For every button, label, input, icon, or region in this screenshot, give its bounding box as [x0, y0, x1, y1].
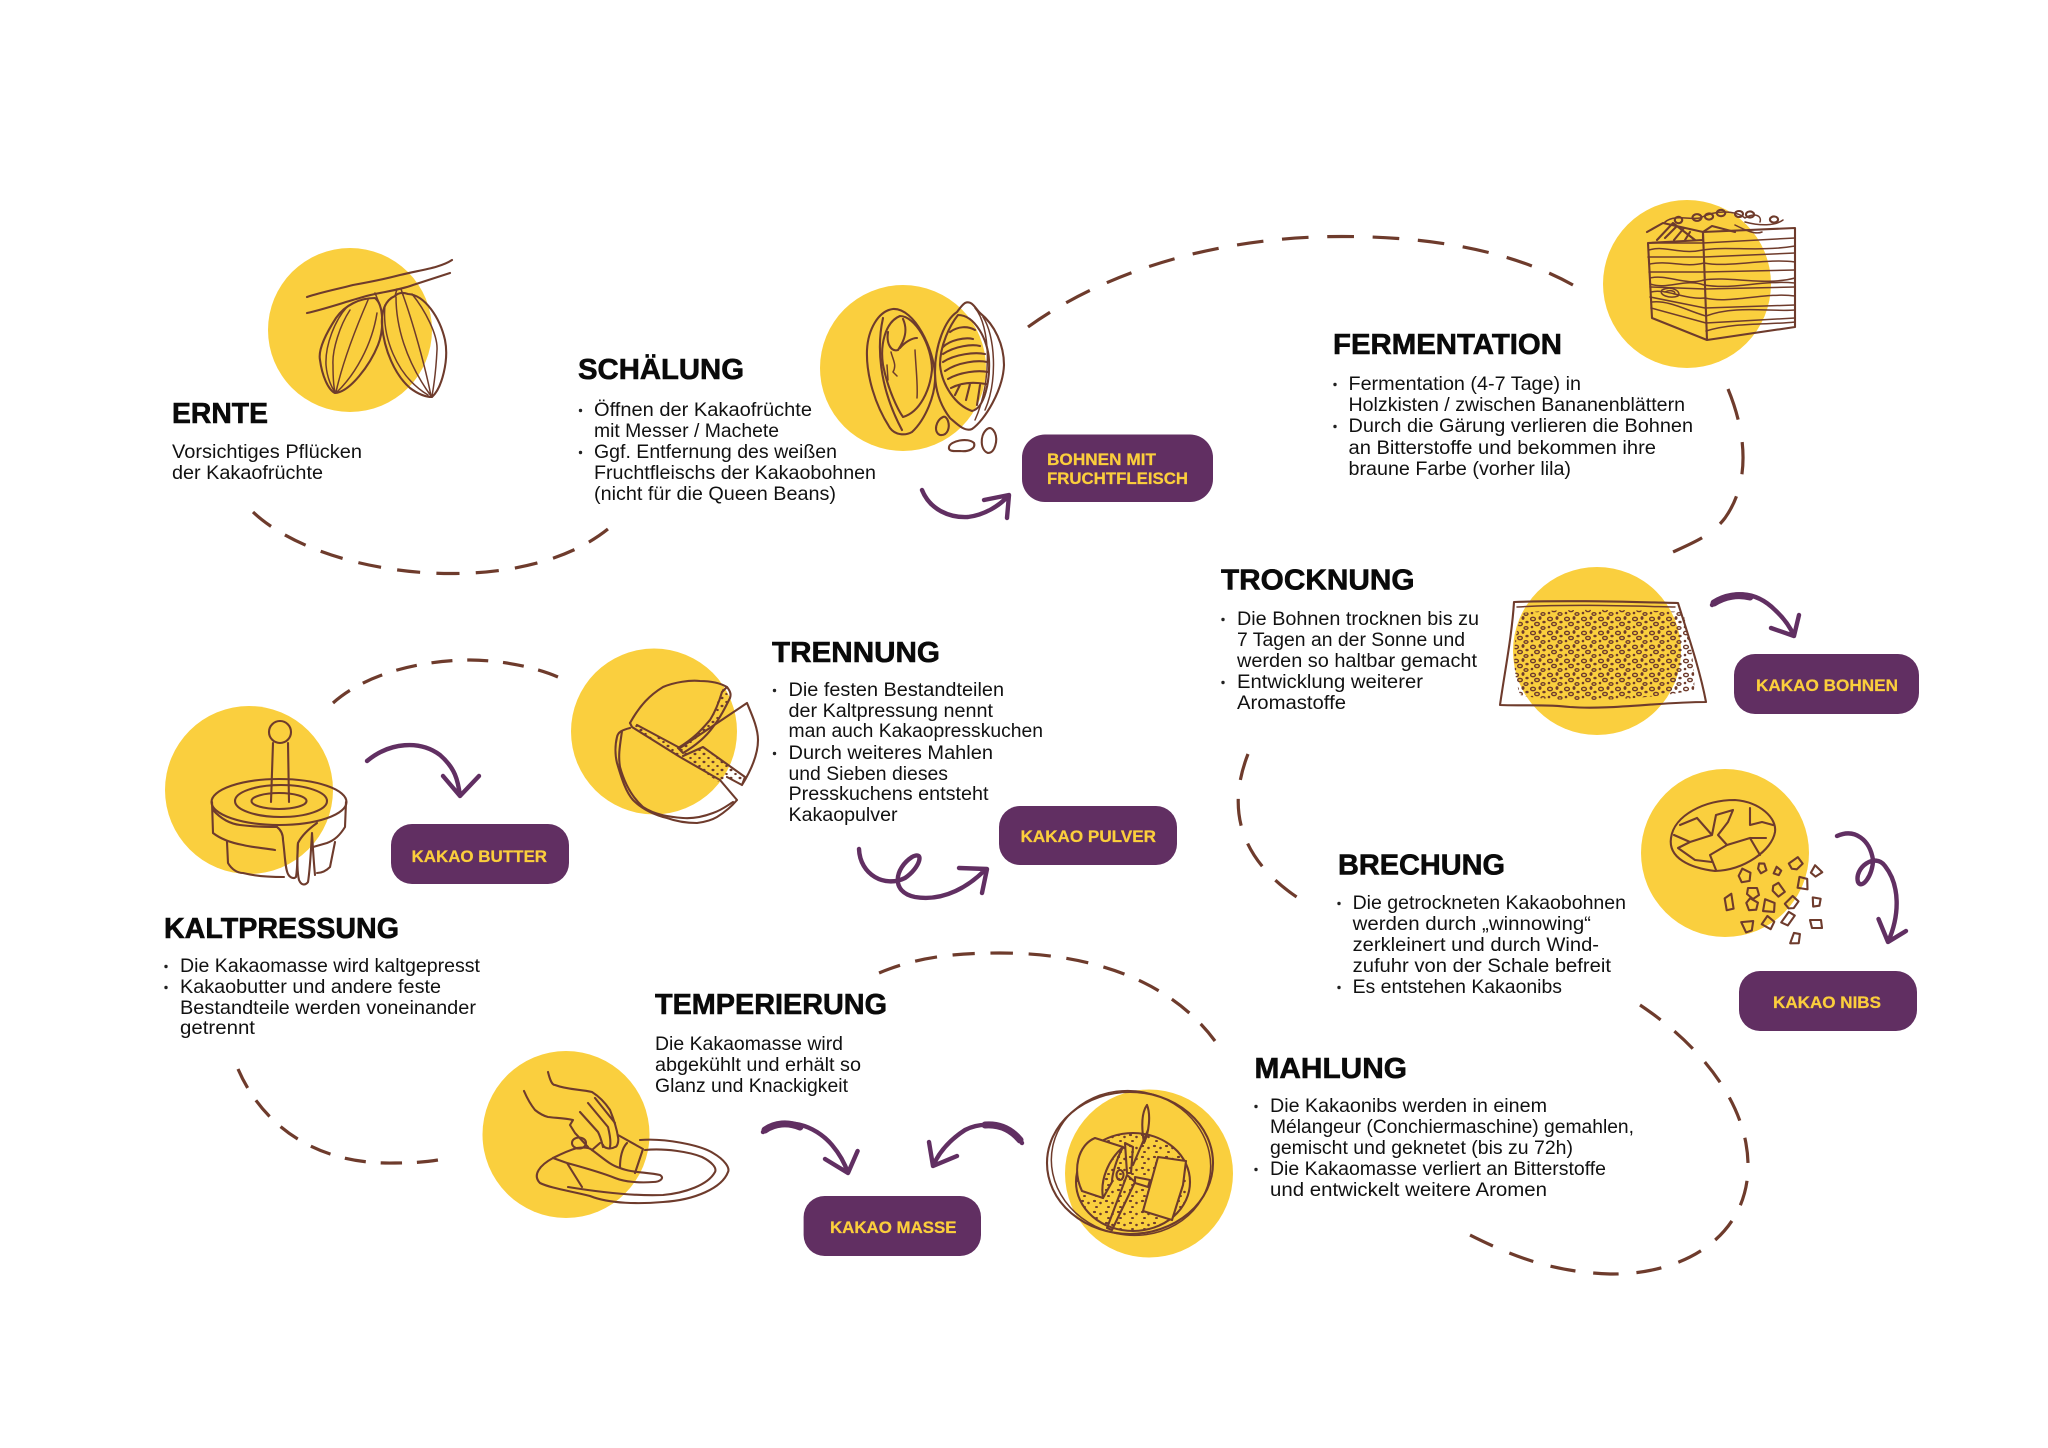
heading: TEMPERIERUNG	[655, 989, 887, 1021]
tag: Bohnen mit Fruchtfleisch	[1022, 434, 1213, 502]
dashed connector: Ernte to Schälung	[253, 512, 608, 574]
tag: Kakao Butter: KAKAO BUTTER	[412, 847, 547, 866]
text block: der Kaltpressung nennt	[788, 701, 994, 722]
icon: press cake wedges	[571, 648, 758, 823]
text block: Glanz und Knackigkeit	[655, 1076, 849, 1097]
text block: Die festen Bestandteilen	[788, 680, 1004, 701]
panel: Fermentation	[1333, 200, 1795, 480]
text block: Kakaopulver	[788, 805, 898, 826]
text block: Durch die Gärung verlieren die Bohnen	[1348, 416, 1693, 437]
panel: Brechung	[1337, 769, 1822, 998]
icon: press with dripping butter	[165, 706, 346, 884]
text block: Holzkisten / zwischen Bananenblättern	[1348, 395, 1685, 416]
text block: gemischt und geknetet (bis zu 72h)	[1270, 1138, 1573, 1159]
tag: Bohnen mit Fruchtfleisch: FRUCHTFLEISCH	[1047, 469, 1188, 488]
tag: Kakao Pulver: KAKAO PULVER	[1020, 827, 1156, 846]
panel: Mahlung	[1038, 1053, 1634, 1258]
text block: Die getrockneten Kakaobohnen	[1353, 893, 1626, 914]
text block	[1254, 1096, 1634, 1201]
dashed connector: Fermentation to Trocknung	[1673, 389, 1743, 552]
text block	[164, 956, 481, 1039]
heading: SCHÄLUNG	[578, 353, 744, 386]
tag: Kakao Masse	[804, 1196, 981, 1256]
text block: an Bitterstoffe und bekommen ihre	[1348, 438, 1656, 459]
arrow: Kaltpressung to Kakao Butter	[367, 745, 479, 796]
heading: FERMENTATION	[1333, 329, 1562, 361]
text block: braune Farbe (vorher lila)	[1348, 459, 1571, 480]
panel: Temperierung	[482, 989, 887, 1218]
icon: melangeur plate	[1038, 1076, 1233, 1258]
arrow: Trennung to Kakao Pulver	[859, 849, 987, 898]
heading: BRECHUNG	[1338, 850, 1505, 882]
text block: und entwickelt weitere Aromen	[1270, 1180, 1547, 1201]
heading: TRENNUNG	[772, 637, 940, 669]
text block: Die Bohnen trocknen bis zu	[1237, 609, 1479, 630]
icon: cracked bean and nibs	[1641, 769, 1822, 946]
text block: Mélangeur (Conchiermaschine) gemahlen,	[1270, 1117, 1634, 1138]
icon: stacked fermentation boxes	[1603, 200, 1795, 368]
text block: mit Messer / Machete	[594, 421, 779, 442]
icon: hand tempering chocolate on plate	[482, 1051, 728, 1218]
icon: opened cocoa pod	[820, 285, 1004, 453]
dashed connector: Trocknung to Brechung	[1238, 754, 1297, 897]
text block	[773, 680, 1043, 826]
panel: Trennung	[571, 637, 1043, 826]
text block: man auch Kakaopresskuchen	[788, 721, 1043, 742]
heading: MAHLUNG	[1254, 1053, 1407, 1085]
dashed connector: Mahlung to Temperierung	[879, 953, 1215, 1041]
text block: Die Kakaomasse wird	[655, 1034, 843, 1055]
panel: Kaltpressung	[164, 706, 481, 1039]
text block: Öffnen der Kakaofrüchte	[594, 400, 812, 421]
tag: Kakao Pulver	[999, 806, 1177, 865]
text block: werden so haltbar gemacht	[1236, 651, 1478, 672]
panel: Schälung	[578, 285, 1004, 505]
arrow: Temperierung to Kakao Masse	[763, 1123, 858, 1173]
icon: cocoa pods on branch	[268, 248, 452, 412]
text block: Fruchtfleischs der Kakaobohnen	[594, 463, 876, 484]
tag: Kakao Nibs: KAKAO NIBS	[1773, 993, 1881, 1012]
dashed connector: Kaltpressung to Trennung	[333, 660, 558, 703]
tag: Kakao Bohnen	[1734, 654, 1919, 714]
panel: Trocknung	[1221, 564, 1706, 735]
text block: Bestandteile werden voneinander	[180, 998, 477, 1019]
text block	[172, 442, 362, 484]
arrow: Trocknung to Kakao Bohnen	[1712, 594, 1799, 636]
panel: Ernte	[172, 248, 452, 484]
tag: Kakao Masse: KAKAO MASSE	[830, 1218, 956, 1237]
dashed connector: Schälung to Fermentation	[1028, 236, 1573, 327]
text block: abgekühlt und erhält so	[655, 1055, 861, 1076]
heading: KALTPRESSUNG	[164, 913, 399, 945]
text block	[655, 1034, 861, 1097]
text block: der Kakaofrüchte	[172, 463, 323, 484]
text block: Die Kakaomasse wird kaltgepresst	[180, 956, 481, 977]
text block: Es entstehen Kakaonibs	[1353, 977, 1562, 998]
text block: Fermentation (4-7 Tage) in	[1348, 374, 1581, 395]
text block: Die Kakaonibs werden in einem	[1270, 1096, 1547, 1117]
arrow: Brechung to Kakao Nibs	[1837, 833, 1906, 942]
icon: drying beans on a sheet	[1500, 567, 1706, 735]
tag: Kakao Nibs	[1739, 971, 1917, 1031]
tag: Kakao Butter	[391, 824, 569, 884]
text block: Durch weiteres Mahlen	[788, 743, 993, 764]
text block: werden durch „winnowing“	[1352, 914, 1591, 935]
arrow: Mahlung to Kakao Masse	[929, 1125, 1022, 1166]
arrow: Schälung to Bohnen mit Fruchtfleisch	[922, 490, 1009, 518]
text block	[1333, 374, 1693, 480]
text block: Die Kakaomasse verliert an Bitterstoffe	[1270, 1159, 1606, 1180]
heading: ERNTE	[172, 398, 268, 430]
text block: Entwicklung weiterer	[1237, 672, 1424, 693]
text block	[1221, 609, 1479, 714]
text block: Presskuchens entsteht	[788, 784, 989, 805]
text block: getrennt	[180, 1018, 256, 1039]
text block: Vorsichtiges Pflücken	[172, 442, 362, 463]
text block: Aromastoffe	[1237, 693, 1346, 714]
text block	[579, 400, 876, 505]
tag: Bohnen mit Fruchtfleisch: BOHNEN MIT	[1047, 450, 1157, 469]
text block: (nicht für die Queen Beans)	[594, 484, 836, 505]
text block: 7 Tagen an der Sonne und	[1237, 630, 1465, 651]
tag: Kakao Bohnen: KAKAO BOHNEN	[1756, 676, 1898, 695]
text block: zerkleinert und durch Wind-	[1353, 935, 1599, 956]
dashed connector: Temperierung to Kaltpressung	[238, 1069, 438, 1163]
text block: zufuhr von der Schale befreit	[1353, 956, 1612, 977]
text block: Kakaobutter und andere feste	[180, 977, 441, 998]
text block	[1337, 893, 1626, 998]
text block: Ggf. Entfernung des weißen	[594, 442, 837, 463]
text block: und Sieben dieses	[788, 764, 948, 785]
dashed connector: Brechung to Mahlung	[1470, 1005, 1748, 1274]
heading: TROCKNUNG	[1221, 564, 1414, 596]
